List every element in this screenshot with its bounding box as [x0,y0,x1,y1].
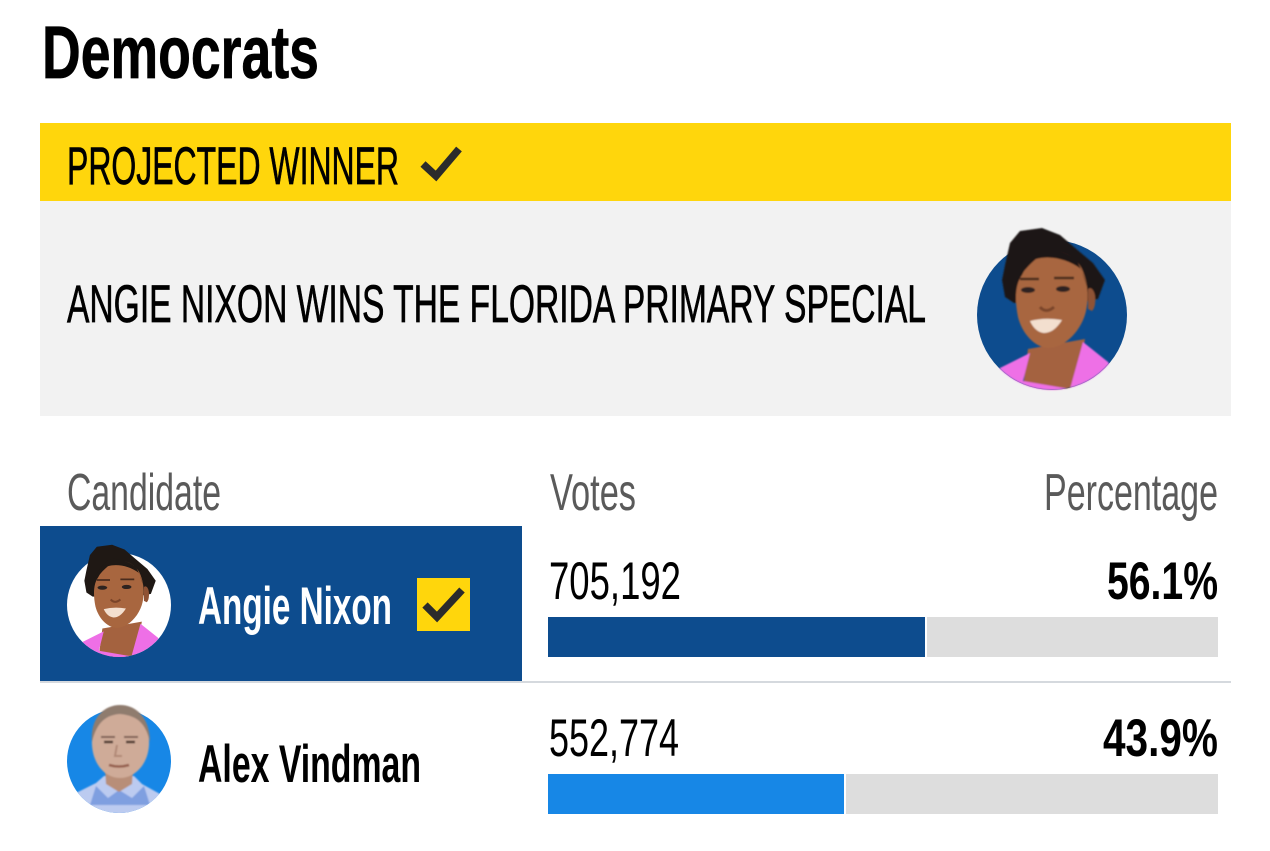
vote bar [548,617,1218,657]
icon: winner check box [417,578,470,631]
vote count: 705,192 [549,552,681,611]
candidate cell [40,526,522,681]
vote count: 552,774 [549,709,679,768]
banner label: PROJECTED WINNER [67,137,399,196]
row: Alex Vindman [67,705,1218,815]
portrait: Alex Vindman [67,705,171,815]
candidate name: Alex Vindman [198,735,421,794]
column heading: Candidate: Candidate [67,464,221,522]
title: Democrats [42,11,319,94]
portrait: Angie Nixon large [977,228,1127,405]
icon: check mark [423,149,459,176]
column heading: Votes: Votes [550,464,636,522]
candidate name: Angie Nixon [198,577,392,636]
panel: winner announcement [40,201,1231,416]
percentage: 43.9% [1103,709,1218,768]
vote bar [548,774,1218,814]
panel: projected winner banner [40,123,1231,201]
portrait: Angie Nixon small [67,545,171,667]
row: Angie Nixon [40,526,1231,683]
percentage: 56.1% [1107,552,1218,611]
